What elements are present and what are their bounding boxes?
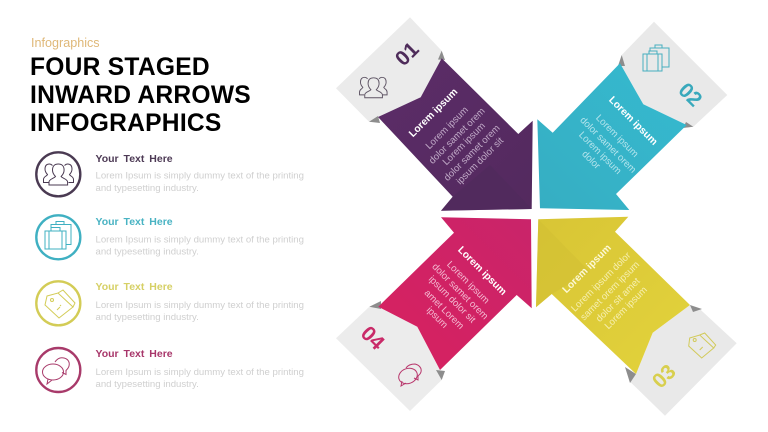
list text 3: and typesetting industry. bbox=[96, 312, 199, 323]
list item 4 bbox=[36, 348, 304, 392]
icon: people bbox=[360, 77, 387, 98]
number 02: 02 bbox=[674, 79, 706, 111]
list text 1: and typesetting industry. bbox=[96, 183, 199, 194]
arrow 01 purple bbox=[336, 17, 533, 211]
icon: bags bbox=[643, 45, 669, 71]
icon: people circle bbox=[36, 152, 80, 196]
number 04: 04 bbox=[356, 322, 389, 355]
arrow 03 yellow bbox=[536, 217, 737, 416]
list text 2: Lorem Ipsum is simply dummy text of the printing bbox=[96, 234, 304, 246]
icon: chat bbox=[397, 364, 421, 386]
icon: tag bbox=[689, 333, 716, 358]
list heading 2: Your Text Here bbox=[96, 216, 173, 228]
arrow text 01: dolor samet orem bbox=[442, 123, 503, 184]
list item 3 bbox=[36, 281, 304, 325]
arrow text 03: Lorem ipsum bbox=[561, 243, 614, 296]
arrow text 02 bbox=[576, 95, 659, 177]
arrow text 03: samet orem ipsum bbox=[578, 259, 642, 323]
tab 03 bbox=[630, 305, 737, 416]
list text 3: Lorem Ipsum is simply dummy text of the printing bbox=[96, 300, 304, 311]
arrow text 01: Lorem ipsum bbox=[407, 87, 460, 140]
arrow shape 02 bbox=[537, 63, 687, 210]
tab 04 bbox=[336, 307, 442, 411]
arrow text 02: dolor bbox=[579, 149, 603, 172]
list text 2 bbox=[96, 234, 304, 258]
list item 2 bbox=[36, 215, 304, 259]
small label: Infographics bbox=[31, 36, 100, 50]
list text 4 bbox=[96, 367, 304, 390]
title bbox=[30, 54, 251, 137]
arrow text 02: dolor samet orem bbox=[577, 115, 638, 176]
title: FOUR STAGED bbox=[30, 54, 210, 81]
arrow text 01: ipsum dolor sit bbox=[454, 135, 506, 187]
arrow text 02: Lorem ipsum bbox=[593, 113, 640, 160]
list text 2: and typesetting industry. bbox=[96, 246, 199, 258]
number 03: 03 bbox=[648, 360, 681, 393]
arrow text 01 bbox=[407, 87, 506, 187]
title: INFOGRAPHICS bbox=[30, 110, 222, 137]
arrow text 04: Lorem ipsum bbox=[455, 245, 508, 298]
arrow text 02: Lorem ipsum bbox=[606, 95, 659, 148]
list item 1 bbox=[36, 152, 304, 196]
list text 3 bbox=[96, 300, 304, 323]
list heading 3: Your Text Here bbox=[96, 281, 173, 293]
tab 01 bbox=[336, 17, 442, 122]
arrow text 04: ipsum bbox=[424, 305, 450, 331]
list text 4: and typesetting industry. bbox=[96, 379, 199, 390]
arrow 04 pink bbox=[336, 217, 532, 411]
arrow text 03 bbox=[561, 243, 650, 332]
arrow shape 03 bbox=[536, 217, 690, 374]
arrow text 03: Lorem ipsum bbox=[603, 285, 650, 332]
icon: chat circle bbox=[36, 348, 80, 392]
arrow text 04: ipsum dolor sit bbox=[426, 274, 478, 326]
list text 1 bbox=[96, 170, 304, 194]
icon: bags circle bbox=[36, 215, 80, 259]
arrow shape 01 bbox=[378, 58, 533, 211]
arrow text 02: Lorem ipsum bbox=[576, 130, 623, 177]
arrow text 01: dolor samet orem bbox=[427, 106, 488, 167]
arrow text 03: dolor sit amet bbox=[594, 276, 643, 324]
list heading 4: Your Text Here bbox=[96, 348, 173, 360]
arrow text 03: Lorem ipsum dolor bbox=[569, 250, 634, 314]
arrow text 04: dolor samet orem bbox=[429, 261, 490, 322]
number 01: 01 bbox=[391, 38, 424, 71]
list heading 1: Your Text Here bbox=[96, 153, 173, 165]
arrow text 01: Lorem ipsum bbox=[424, 105, 471, 152]
arrow text 04 bbox=[422, 245, 508, 332]
list text 1: Lorem Ipsum is simply dummy text of the printing bbox=[96, 170, 304, 182]
tab 02 bbox=[620, 22, 727, 127]
icon: tag circle bbox=[36, 281, 80, 325]
arrow text 01: Lorem ipsum bbox=[441, 121, 488, 168]
title: INWARD ARROWS bbox=[30, 82, 251, 109]
list text 4: Lorem Ipsum is simply dummy text of the printing bbox=[96, 367, 304, 378]
arrow text 04: Lorem ipsum bbox=[444, 259, 491, 306]
arrow shape 04 bbox=[378, 217, 532, 370]
arrow 02 teal bbox=[537, 22, 727, 210]
arrow text 04: amet Lorem bbox=[422, 288, 466, 332]
